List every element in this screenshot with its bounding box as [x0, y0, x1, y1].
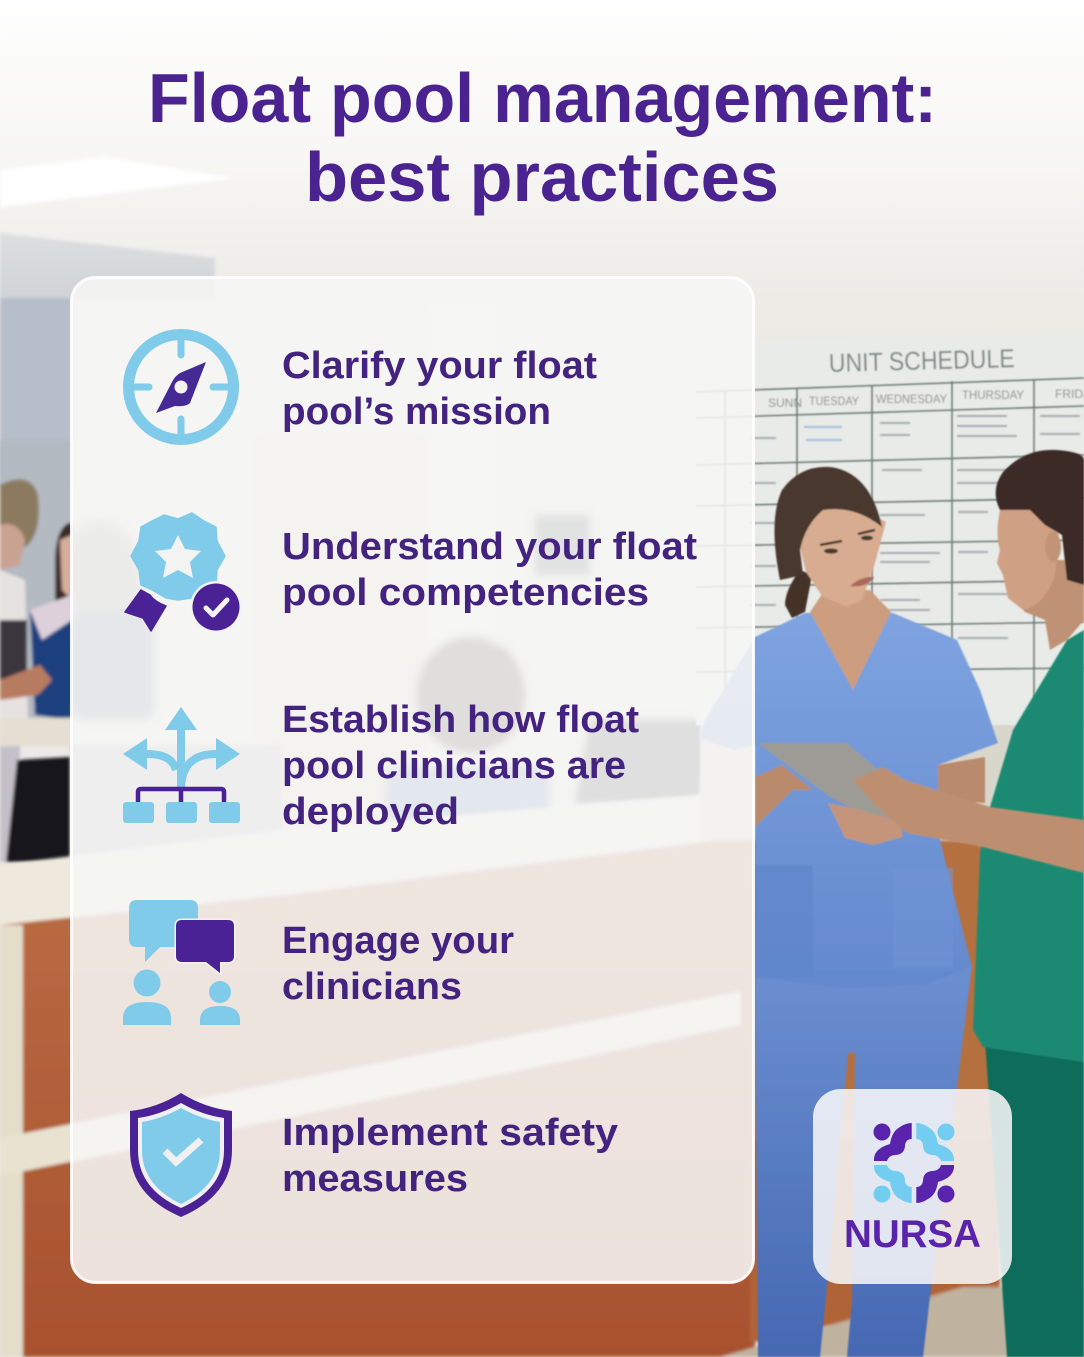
- unit schedule whiteboard: TUESDAY: [809, 394, 859, 408]
- nurse in green scrubs: [973, 450, 1084, 1357]
- step 2 text: Understand your float: [282, 526, 697, 568]
- step 3 text: Establish how float: [282, 699, 639, 741]
- title: [148, 59, 937, 216]
- unit schedule whiteboard: THURSDAY: [962, 388, 1024, 402]
- step 5 text: Implement safety: [282, 1112, 618, 1154]
- unit schedule whiteboard: WEDNESDAY: [876, 392, 947, 406]
- step 4 text: [282, 920, 514, 1008]
- step 1 text: Clarify your float: [282, 345, 597, 387]
- logo wordmark: NURSA: [844, 1213, 981, 1256]
- icon: award badge with check: [125, 513, 242, 633]
- step 1 text: [282, 345, 597, 433]
- step 2 text: pool competencies: [282, 572, 649, 614]
- step 3 text: pool clinicians are: [282, 745, 626, 787]
- step 4 text: clinicians: [282, 966, 462, 1008]
- panel: best practices list: [72, 278, 754, 1282]
- icon: branching arrows and org chart: [123, 707, 240, 823]
- unit schedule whiteboard: SUNN: [768, 396, 802, 410]
- icon: compass: [128, 334, 234, 440]
- step 2 text: [282, 526, 697, 614]
- icon: NURSA cross mark: [874, 1123, 954, 1203]
- top white fade: [0, 0, 1084, 300]
- icon: speech bubbles and two people: [123, 900, 240, 1025]
- unit schedule whiteboard: UNIT SCHEDULE: [828, 343, 1015, 378]
- left group of staff: [0, 440, 72, 862]
- step 3 text: [282, 699, 639, 833]
- title: best practices: [305, 138, 779, 216]
- unit schedule whiteboard: [696, 332, 1084, 725]
- step 5 text: measures: [282, 1158, 468, 1200]
- step 5 text: [282, 1112, 618, 1200]
- icon: safety shield: [130, 1093, 232, 1217]
- title: Float pool management:: [148, 59, 937, 137]
- logo card: NURSA: [813, 1089, 1012, 1284]
- step 3 text: deployed: [282, 791, 459, 833]
- step 1 text: pool’s mission: [282, 391, 551, 433]
- step 4 text: Engage your: [282, 920, 514, 962]
- desk: counter and wood front: [0, 720, 1084, 1357]
- nurse in blue scrubs: [699, 467, 1084, 1357]
